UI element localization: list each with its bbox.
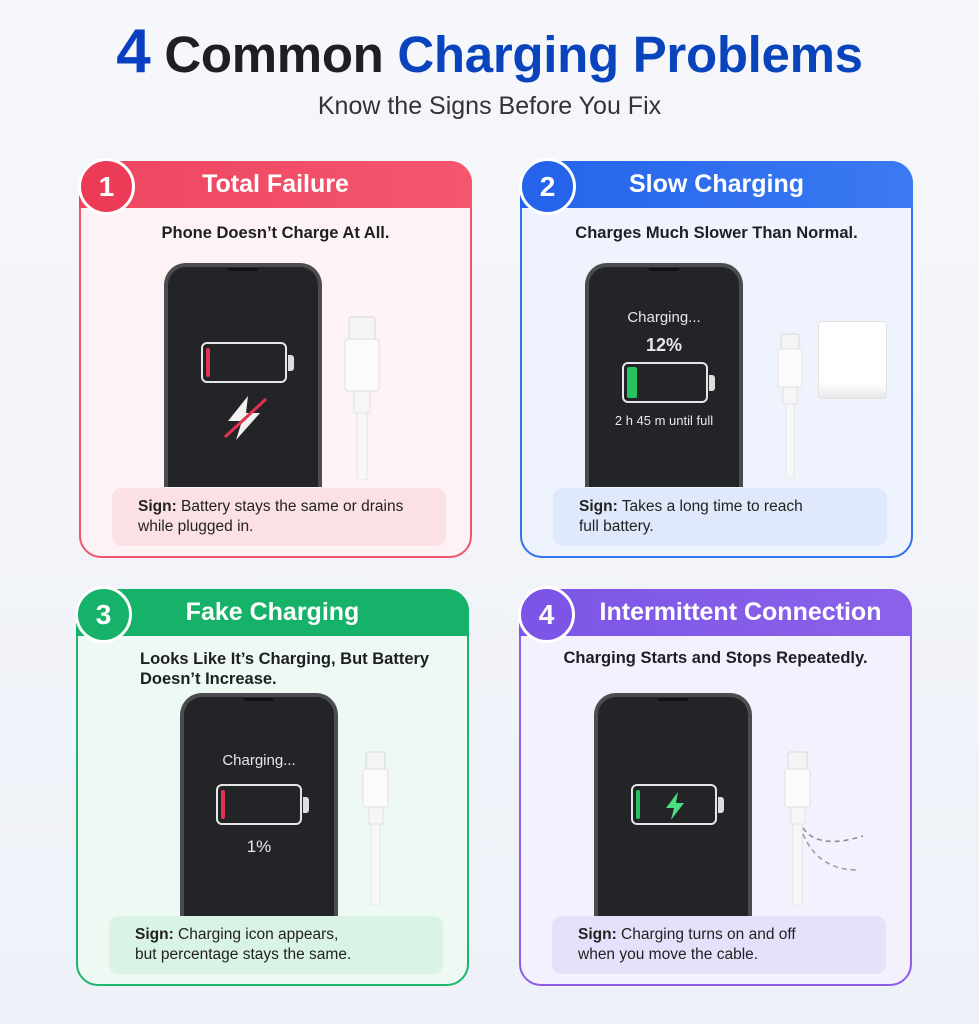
header: intermittent connection [519, 589, 912, 636]
battery with bolt [631, 784, 717, 825]
icon: usb-c cable [778, 334, 802, 478]
icon: power adapter [818, 321, 887, 399]
sign box: Sign: Takes a long time to reach [579, 498, 803, 515]
subtitle: Know the Signs Before You Fix [318, 92, 661, 120]
header: intermittent connection: Intermittent Connection [600, 598, 881, 626]
battery low green [622, 362, 708, 403]
subheading: Looks Like It’s Charging, But Battery [140, 650, 429, 668]
icon: crossed bolt [224, 396, 267, 440]
icon: usb-c cable [362, 752, 388, 905]
subheading: Charges Much Slower Than Normal. [575, 224, 858, 242]
phone with charging bolt [594, 693, 752, 917]
sign box [553, 488, 887, 546]
title: 4 Common Charging Problems [116, 17, 863, 86]
time remaining: 2 h 45 m until full [615, 413, 713, 428]
sign box: Sign: Charging turns on and off [578, 926, 796, 943]
panel: fake charging [76, 589, 469, 986]
phone with dead battery [164, 263, 322, 487]
sign box: when you move the cable. [578, 946, 758, 963]
panel: total failure [79, 161, 472, 558]
header: fake charging [76, 589, 469, 636]
percentage: 12% [646, 335, 682, 355]
phone with stuck battery [180, 693, 338, 917]
sign box: but percentage stays the same. [135, 946, 351, 963]
number badge 4 [518, 586, 575, 643]
percentage: 1% [247, 837, 271, 856]
sign box [552, 916, 886, 974]
header: slow charging: Slow Charging [629, 170, 804, 198]
icon: usb-c cable [344, 316, 380, 480]
subheading: Phone Doesn’t Charge At All. [162, 224, 389, 242]
subheading: Charging Starts and Stops Repeatedly. [563, 649, 868, 667]
phone with slow charge [585, 263, 743, 487]
number badge 2 [519, 158, 576, 215]
number badge 1: 1 [99, 171, 114, 202]
subheading [140, 650, 429, 688]
panel: slow charging [520, 161, 913, 558]
number badge 4: 4 [539, 599, 554, 630]
charging text: Charging... [627, 309, 701, 326]
header: slow charging [520, 161, 913, 208]
number badge 3: 3 [96, 599, 111, 630]
header: total failure [79, 161, 472, 208]
charging text: Charging... [222, 752, 296, 769]
sign box: full battery. [579, 518, 654, 535]
sign box: while plugged in. [138, 518, 253, 535]
panel: intermittent connection [519, 589, 912, 986]
sign box: Sign: Battery stays the same or drains [138, 498, 403, 515]
header: total failure: Total Failure [202, 170, 349, 198]
icon: loose cable with motion lines [784, 752, 864, 905]
sign box [112, 488, 446, 546]
number badge 3 [75, 586, 132, 643]
battery empty [201, 342, 287, 383]
sign box: Sign: Charging icon appears, [135, 926, 338, 943]
header: fake charging: Fake Charging [186, 598, 359, 626]
number badge 1 [78, 158, 135, 215]
subheading: Doesn’t Increase. [140, 670, 277, 688]
sign box [109, 916, 443, 974]
number badge 2: 2 [540, 171, 555, 202]
battery empty [216, 784, 302, 825]
